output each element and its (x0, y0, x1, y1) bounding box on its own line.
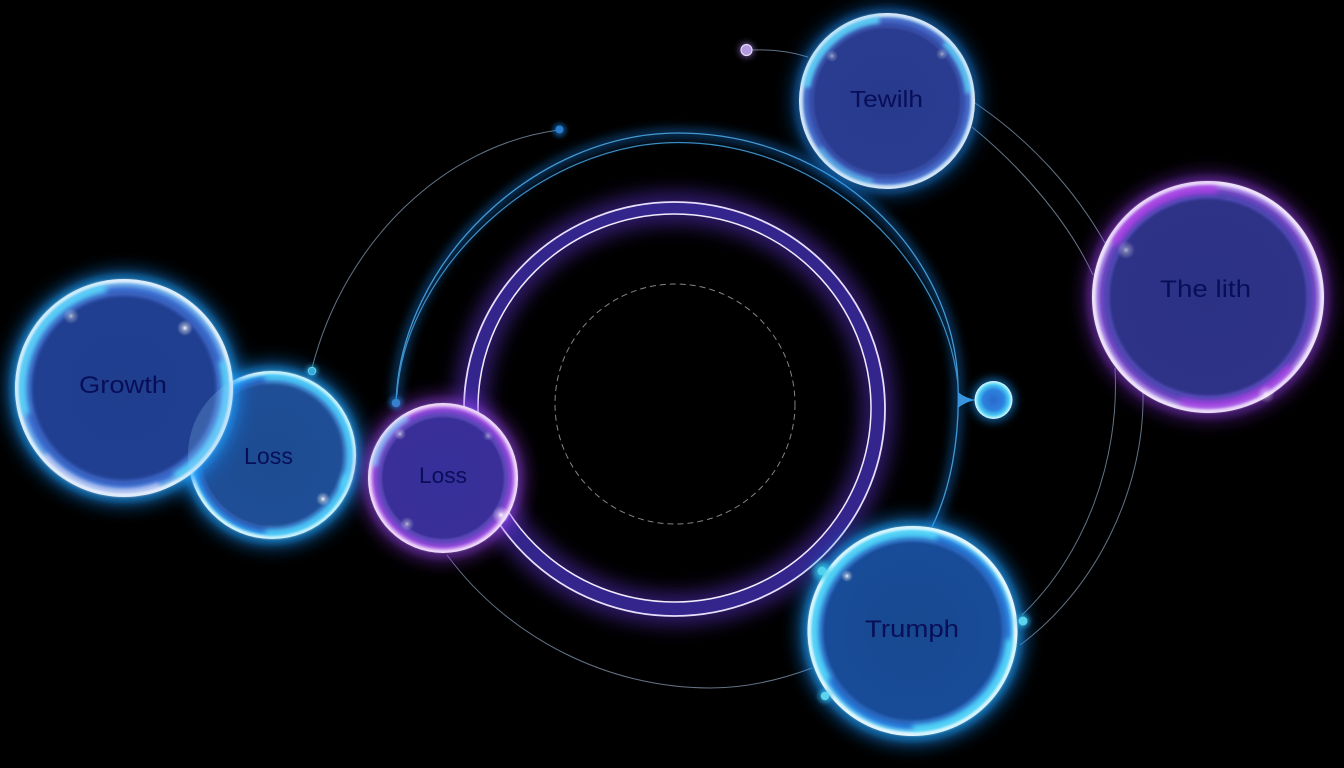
bubble: Tewilh (798, 12, 976, 190)
node: top blue dot (552, 123, 566, 137)
label: Growth: Growth (79, 372, 167, 399)
label: Tewilh: Tewilh (850, 86, 923, 112)
bubble: Growth (14, 278, 234, 498)
central purple ring (464, 202, 885, 616)
label: The lith: The lith (1160, 276, 1251, 303)
bubble: Trumph (806, 525, 1018, 737)
label: Loss: Loss (244, 443, 293, 469)
label: Loss purple: Loss (419, 463, 467, 488)
node: purple dot (738, 42, 754, 58)
bubble: The lith (1091, 180, 1325, 414)
bubble: Loss right-lower (187, 370, 357, 540)
node: small blue bubble (972, 379, 1014, 421)
node: Trumph lower dot (818, 689, 832, 703)
thin connector arcs (312, 50, 1143, 688)
dashed inner circle (555, 284, 795, 524)
bubble: Loss purple (367, 402, 519, 554)
blue orbit double arc (396, 133, 958, 527)
node: left cyan dot (306, 365, 318, 377)
node: orbit dot (389, 396, 403, 410)
node: Trumph right dot (1016, 614, 1030, 628)
label: Trumph: Trumph (865, 616, 959, 643)
arrow: pointer into orbit (958, 392, 976, 408)
node: glow dot on Trumph (813, 562, 831, 580)
